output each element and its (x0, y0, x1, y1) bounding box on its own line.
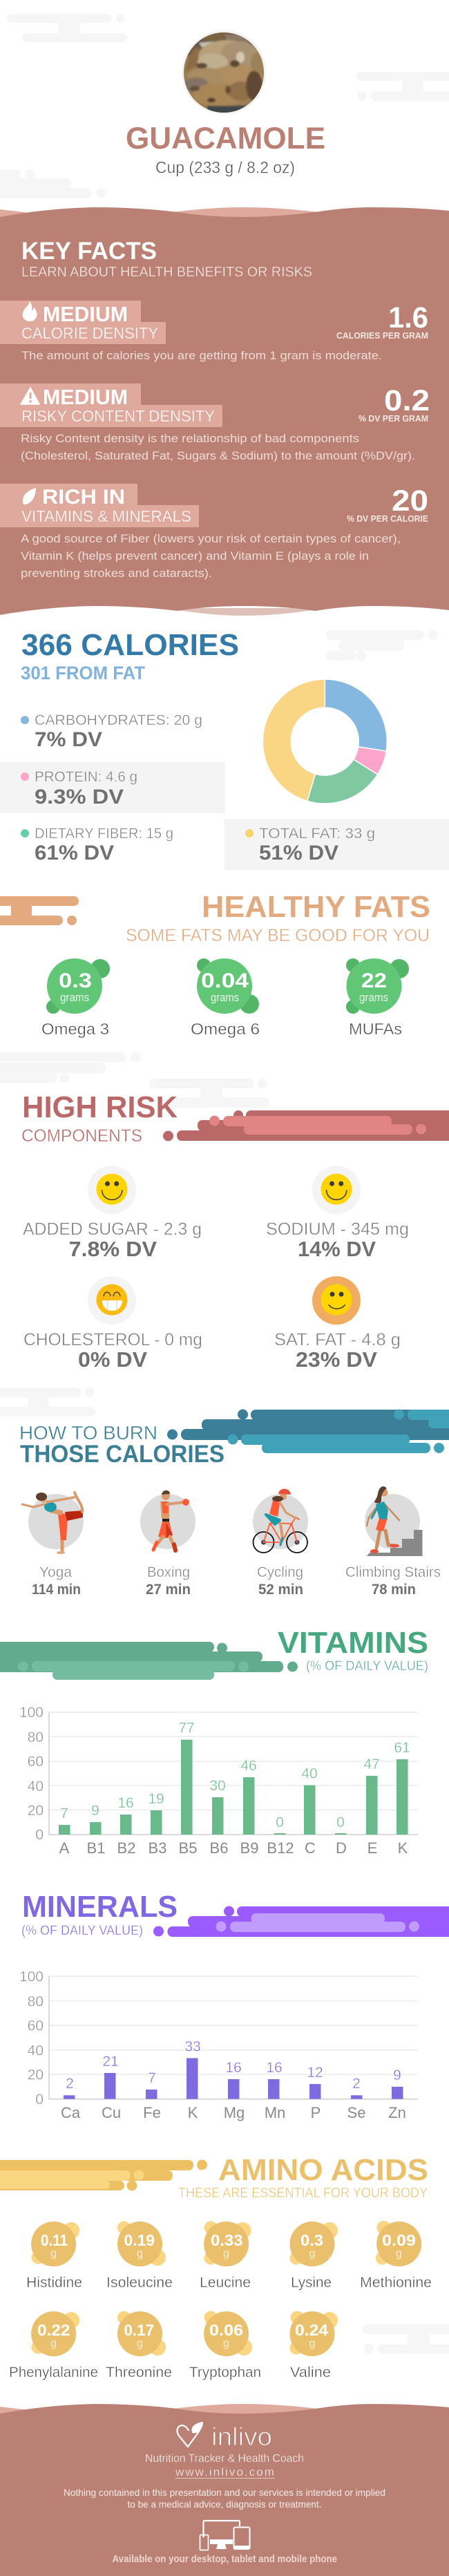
banner: burn (167, 1410, 449, 1453)
high risk heading: HIGH RISK (22, 1090, 178, 1124)
fact: rich in vitamins and minerals: A good source of Fiber (lowers your risk of certain types of cancer), (21, 532, 401, 545)
amino: valine: g (309, 2338, 315, 2349)
component: sodium: SODIUM - 345 mg (266, 1220, 409, 1239)
bar chart: minerals: 40 (28, 2043, 44, 2059)
component: saturated fat (274, 1276, 401, 1372)
bar chart: vitamins: B9 (240, 1839, 258, 1857)
bar chart: vitamins: 46 (240, 1758, 257, 1774)
component: sodium: 14% DV (298, 1237, 376, 1261)
disclaimer: to be a medical advice, diagnosis or treatment. (127, 2499, 322, 2510)
bar chart: vitamins: B1 (87, 1839, 105, 1857)
amino: phenylalanine: g (50, 2338, 57, 2349)
amino: tryptophan (189, 2311, 261, 2380)
bar chart: minerals: 60 (28, 2018, 44, 2034)
amino acids heading: AMINO ACIDS (218, 2153, 428, 2187)
bar chart: vitamins: 0 (276, 1815, 284, 1830)
bar chart: vitamins: 0 (336, 1815, 345, 1830)
amino: leucine: g (223, 2248, 229, 2260)
bar chart: minerals (19, 1969, 418, 2121)
component: cholesterol: CHOLESTEROL - 0 mg (23, 1330, 202, 1349)
legend: carbohydrates (21, 712, 202, 751)
bar chart: vitamins: K (398, 1839, 408, 1857)
amino: leucine: 0.33 (211, 2231, 243, 2249)
bar chart: vitamins: 61 (394, 1740, 410, 1756)
legend: protein: 9.3% DV (35, 786, 124, 808)
bar chart: minerals: 21 (102, 2054, 119, 2070)
decorative cloud: burn (0, 1388, 95, 1417)
vitamins heading: VITAMINS (278, 1626, 428, 1660)
fact: risky content density: MEDIUM (43, 386, 128, 409)
bar chart: minerals: Zn (388, 2104, 406, 2121)
activity: boxing: Boxing (147, 1564, 190, 1580)
amino: tryptophan: g (223, 2338, 229, 2349)
badge: omega 3 (41, 958, 110, 1038)
bar chart: minerals: 16 (266, 2060, 283, 2076)
decorative clouds: header (0, 14, 449, 198)
fact: calorie density: 1.6 (388, 301, 428, 334)
bar chart: vitamins: 47 (363, 1756, 380, 1772)
amino: threonine: Threonine (106, 2365, 172, 2380)
bar chart: vitamins (19, 1705, 418, 1857)
amino: valine (290, 2311, 338, 2380)
bar chart: vitamins: B2 (117, 1839, 135, 1857)
website: www.inlivo.com (175, 2465, 274, 2479)
amino: valine: Valine (290, 2365, 331, 2380)
donut chart (262, 679, 387, 804)
legend: total fat: 51% DV (259, 842, 338, 864)
fact: rich in vitamins and minerals: RICH IN (42, 486, 125, 509)
bar chart: minerals: Cu (102, 2104, 121, 2121)
serving size: Cup (233 g / 8.2 oz) (155, 159, 295, 178)
bar chart: minerals: K (188, 2104, 198, 2121)
icon: cyclist figure (253, 1489, 307, 1553)
bar chart: vitamins: 100 (19, 1705, 44, 1721)
bar chart: vitamins: 60 (28, 1754, 44, 1770)
activity: yoga (22, 1493, 84, 1598)
activity: climbing stairs: Climbing Stairs (345, 1564, 441, 1580)
legend: total fat (224, 819, 449, 870)
banner: minerals (153, 1906, 449, 1937)
bar chart: minerals: 16 (225, 2060, 242, 2076)
bar chart: vitamins: 19 (148, 1791, 164, 1807)
icon: flame (23, 301, 37, 321)
availability note: Available on your desktop, tablet and mobile phone (112, 2553, 337, 2565)
activity: yoga: 114 min (32, 1582, 81, 1598)
bar chart: vitamins: B6 (210, 1839, 228, 1857)
panel: healthy fats (0, 890, 430, 1038)
amino: isoleucine: Isoleucine (106, 2275, 173, 2291)
fact: risky content density (0, 383, 430, 462)
fact: rich in vitamins and minerals (0, 484, 428, 580)
component: added sugar (23, 1166, 202, 1261)
bar chart: vitamins: 16 (117, 1795, 134, 1811)
bar chart: vitamins: 40 (28, 1779, 44, 1794)
key facts heading: KEY FACTS (21, 238, 157, 265)
component: added sugar: 7.8% DV (69, 1237, 157, 1261)
bar chart: minerals: 12 (307, 2065, 323, 2081)
badge: omega 6 (191, 958, 260, 1038)
bar chart: minerals: 2 (352, 2076, 361, 2092)
amino: histidine: g (50, 2248, 57, 2260)
amino acids subtitle: THESE ARE ESSENTIAL FOR YOUR BODY (178, 2186, 428, 2201)
bar chart: minerals: 33 (184, 2038, 201, 2055)
amino: methionine: Methionine (360, 2275, 432, 2291)
amino: methionine (360, 2221, 432, 2291)
legend: dietary fiber (21, 826, 173, 864)
fact: rich in vitamins and minerals: Vitamin K (helps prevent cancer) and Vitamin E (plays a role in (21, 549, 369, 562)
fact: risky content density: Risky Content density is the relationship of bad components (21, 432, 359, 445)
badge: omega 3: grams (60, 991, 89, 1004)
activity: climbing stairs: 78 min (372, 1582, 416, 1598)
bar chart: minerals: Fe (143, 2104, 161, 2121)
minerals heading: MINERALS (22, 1890, 178, 1924)
logo wordmark: inlivo (211, 2423, 272, 2451)
legend: carbohydrates: CARBOHYDRATES: 20 g (35, 712, 202, 728)
bar chart: vitamins: 30 (209, 1778, 226, 1794)
activity: yoga: Yoga (39, 1564, 72, 1580)
component: saturated fat: SAT. FAT - 4.8 g (274, 1330, 401, 1349)
fact: calorie density: MEDIUM (43, 303, 128, 326)
amino: methionine: 0.09 (382, 2231, 416, 2249)
fact: calorie density: CALORIES PER GRAM (336, 330, 428, 341)
panel: minerals (19, 1890, 449, 2121)
bar chart: vitamins: D (336, 1839, 347, 1857)
healthy fats subtitle: SOME FATS MAY BE GOOD FOR YOU (126, 926, 430, 945)
activity: cycling: 52 min (258, 1582, 303, 1598)
amino: leucine (200, 2221, 251, 2291)
fact: risky content density: 0.2 (384, 384, 430, 417)
key facts subtitle: LEARN ABOUT HEALTH BENEFITS OR RISKS (21, 265, 312, 280)
disclaimer: Nothing contained in this presentation and our services is intended or implied (64, 2487, 385, 2498)
bar chart: minerals: P (311, 2104, 321, 2121)
bar chart: vitamins: 7 (60, 1806, 68, 1821)
disclaimer (64, 2487, 385, 2510)
amino: phenylalanine (9, 2311, 98, 2380)
icon: devices (200, 2521, 250, 2550)
bar chart: vitamins: B5 (179, 1839, 197, 1857)
amino: lysine (290, 2222, 338, 2291)
icon: boxer figure (153, 1490, 189, 1551)
amino: tryptophan: 0.06 (209, 2321, 243, 2339)
fact: rich in vitamins and minerals: preventing strokes and cataracts). (21, 567, 212, 580)
icon: leaf (23, 488, 36, 504)
badge: omega 6: grams (211, 991, 239, 1004)
amino: phenylalanine: 0.22 (37, 2321, 70, 2339)
footer panel (0, 2404, 449, 2576)
fact: calorie density (0, 301, 428, 362)
amino: threonine (106, 2311, 172, 2380)
bar chart: minerals: 100 (19, 1969, 44, 1985)
bar chart: minerals: Mn (265, 2104, 285, 2121)
bar chart: minerals: 20 (28, 2067, 44, 2083)
activity: climbing stairs (345, 1486, 441, 1598)
icon: warning triangle (21, 388, 39, 404)
badge: mufas (346, 958, 409, 1038)
icon: yoga figure (22, 1493, 83, 1554)
minerals subtitle: (% OF DAILY VALUE) (21, 1923, 143, 1938)
amino: threonine: g (137, 2338, 143, 2349)
high risk subtitle: COMPONENTS (21, 1126, 142, 1146)
tagline: Nutrition Tracker & Health Coach (145, 2452, 304, 2465)
badge: omega 6: Omega 6 (191, 1020, 260, 1038)
amino: isoleucine: 0.19 (124, 2231, 155, 2249)
legend: carbohydrates: 7% DV (35, 728, 102, 751)
bar chart: minerals: Se (347, 2104, 365, 2121)
fact: rich in vitamins and minerals: 20 (392, 484, 428, 518)
panel: calories (0, 629, 449, 870)
decorative cloud: amino (362, 2324, 449, 2354)
bar chart: minerals: Mg (224, 2104, 245, 2121)
fact: rich in vitamins and minerals: VITAMINS & MINERALS (21, 507, 191, 525)
amino: histidine: Histidine (26, 2275, 82, 2291)
badge: omega 3: 0.3 (59, 969, 92, 992)
legend: protein: PROTEIN: 4.6 g (35, 769, 137, 785)
vitamins subtitle: (% OF DAILY VALUE) (306, 1658, 428, 1674)
activity: cycling (253, 1489, 308, 1598)
bar chart: vitamins: 77 (178, 1721, 195, 1736)
component: cholesterol (23, 1276, 202, 1372)
component: added sugar: ADDED SUGAR - 2.3 g (23, 1220, 202, 1239)
panel: key facts (0, 207, 449, 616)
calories heading: 366 CALORIES (21, 629, 239, 662)
amino: phenylalanine: Phenylalanine (9, 2365, 98, 2380)
healthy fats heading: HEALTHY FATS (202, 890, 430, 924)
amino: isoleucine: g (137, 2248, 143, 2260)
bar chart: vitamins: E (367, 1839, 377, 1857)
decorative clouds: middle (0, 1052, 269, 1108)
fact: risky content density: % DV PER GRAM (359, 413, 428, 424)
amino: histidine (26, 2222, 82, 2291)
panel: how to burn those calories (19, 1410, 449, 1598)
legend: protein (0, 762, 225, 813)
amino: methionine: g (396, 2248, 402, 2260)
fact: calorie density: The amount of calories you are getting from 1 gram is moderate. (21, 349, 382, 362)
bar chart: vitamins: 0 (35, 1827, 44, 1843)
banner: high risk (163, 1110, 449, 1142)
bar chart: minerals: 0 (35, 2092, 44, 2108)
component: cholesterol: 0% DV (78, 1347, 147, 1372)
activity: cycling: Cycling (257, 1564, 303, 1580)
badge: omega 3: Omega 3 (41, 1020, 109, 1038)
amino: leucine: Leucine (200, 2275, 251, 2291)
amino: lysine: Lysine (291, 2275, 332, 2291)
amino: histidine: 0.11 (41, 2231, 68, 2249)
fact: risky content density: (Cholesterol, Saturated Fat, Sugars & Sodium) to the amount (%DV/gr). (21, 449, 415, 462)
bar chart: vitamins: B3 (149, 1839, 166, 1857)
fact: risky content density: RISKY CONTENT DENSITY (21, 407, 215, 425)
activity: boxing (140, 1490, 195, 1598)
activity: boxing: 27 min (146, 1582, 191, 1598)
bar chart: minerals: 9 (393, 2067, 401, 2083)
amino: tryptophan: Tryptophan (189, 2365, 261, 2380)
bar chart: vitamins: A (59, 1839, 70, 1857)
bar chart: vitamins: 80 (28, 1730, 44, 1745)
legend: dietary fiber: 61% DV (35, 842, 114, 864)
amino: lysine: 0.3 (300, 2231, 323, 2249)
badge: mufas: grams (359, 991, 388, 1004)
banner: amino acids (0, 2160, 207, 2190)
amino: threonine: 0.17 (124, 2321, 154, 2339)
bar chart: vitamins: 9 (91, 1803, 99, 1819)
banner: healthy fats (0, 896, 79, 925)
bar chart: vitamins: 40 (301, 1766, 318, 1781)
burn heading light: HOW TO BURN (19, 1422, 157, 1443)
bar chart: vitamins: C (305, 1839, 316, 1857)
legend: dietary fiber: DIETARY FIBER: 15 g (35, 826, 173, 842)
panel: amino acids (0, 2153, 432, 2380)
icon: stairs climber (367, 1486, 423, 1556)
bar chart: minerals: 2 (66, 2076, 74, 2092)
component: sodium (266, 1166, 409, 1261)
banner: vitamins (0, 1642, 298, 1680)
badge: mufas: 22 (361, 969, 387, 992)
panel: high risk components (21, 1090, 449, 1372)
bar chart: minerals: 80 (28, 1994, 44, 2009)
component: saturated fat: 23% DV (296, 1347, 377, 1372)
fact: calorie density: CALORIE DENSITY (21, 324, 158, 342)
food photo (182, 30, 267, 115)
bar chart: minerals: Ca (61, 2104, 81, 2121)
amino: valine: 0.24 (295, 2321, 328, 2339)
calories from fat: 301 FROM FAT (21, 663, 145, 683)
bar chart: minerals: 7 (148, 2070, 156, 2086)
panel: vitamins (0, 1626, 428, 1857)
bar chart: vitamins: B12 (267, 1839, 294, 1857)
fact: rich in vitamins and minerals: % DV PER CALORIE (347, 513, 428, 524)
title: GUACAMOLE (126, 122, 325, 155)
badge: omega 6: 0.04 (201, 969, 249, 992)
badge: mufas: MUFAs (349, 1020, 402, 1038)
logo: inlivo heart (177, 2423, 202, 2447)
legend: total fat: TOTAL FAT: 33 g (259, 826, 375, 842)
amino: isoleucine (106, 2221, 173, 2291)
amino: lysine: g (309, 2248, 315, 2260)
bar chart: vitamins: 20 (28, 1803, 44, 1819)
burn heading bold: THOSE CALORIES (20, 1441, 224, 1468)
